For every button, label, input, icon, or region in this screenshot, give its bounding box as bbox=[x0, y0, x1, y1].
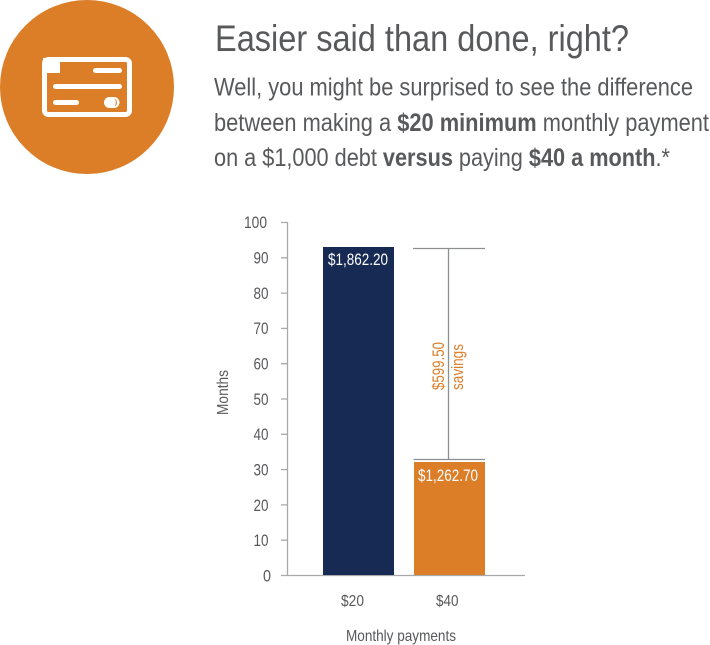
x axis labels: $20 bbox=[341, 593, 364, 610]
x axis title: Monthly payments bbox=[346, 628, 456, 645]
y axis: 70 bbox=[254, 319, 268, 338]
y axis title: Months bbox=[215, 370, 232, 415]
icon: credit card in orange circle bbox=[0, 0, 174, 174]
y axis: 100 bbox=[244, 213, 267, 232]
intro text bbox=[214, 74, 709, 172]
x axis labels: $40 bbox=[436, 593, 459, 610]
bar: $40 bbox=[414, 462, 485, 575]
y axis: 0 bbox=[263, 566, 271, 586]
bar: $40: $1,262.70 bbox=[418, 467, 478, 485]
savings label bbox=[429, 342, 467, 390]
y axis: 40 bbox=[254, 425, 268, 444]
y axis: 60 bbox=[254, 354, 268, 374]
intro text: on a $1,000 debt versus paying $40 a month.* bbox=[214, 144, 670, 172]
y axis: 30 bbox=[254, 460, 268, 480]
bar chart: months by monthly payment bbox=[215, 213, 525, 645]
y axis: 80 bbox=[254, 284, 268, 303]
y axis: 20 bbox=[254, 496, 268, 515]
y axis: 90 bbox=[254, 248, 268, 268]
bar: $20: $1,862.20 bbox=[328, 251, 388, 269]
savings label: $599.50 bbox=[429, 342, 448, 390]
savings bracket bbox=[413, 248, 485, 460]
y axis: 50 bbox=[254, 390, 268, 409]
savings label: savings bbox=[448, 344, 467, 390]
title: Easier said than done, right? bbox=[215, 18, 629, 59]
bar: $20 bbox=[323, 247, 394, 575]
y axis: 10 bbox=[254, 531, 268, 550]
x axis labels bbox=[341, 593, 459, 610]
y axis bbox=[244, 213, 525, 586]
